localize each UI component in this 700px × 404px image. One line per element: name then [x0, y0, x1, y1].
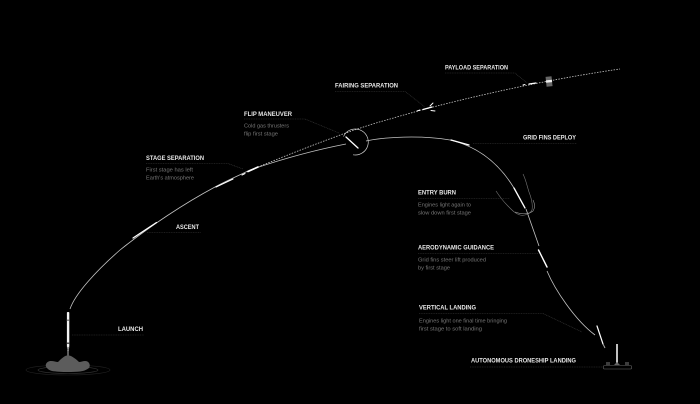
label: vertical landing: VERTICAL LANDING: [419, 304, 476, 312]
label: entry burn: slow down first stage: [418, 210, 471, 216]
stage separation rockets: [216, 167, 258, 187]
droneship with landed rocket: [604, 344, 632, 369]
label: flip maneuver: flip first stage: [244, 132, 278, 138]
label: launch: LAUNCH: [118, 326, 143, 333]
label: entry burn: [418, 190, 510, 216]
grid fins deploy rocket: [451, 140, 469, 145]
ascent rocket: [133, 222, 156, 238]
label: vertical landing: Engines light one final time bringing: [419, 318, 507, 324]
label: flip maneuver: Cold gas thrusters: [244, 124, 289, 130]
launch rocket: [67, 312, 69, 351]
label: payload separation: PAYLOAD SEPARATION: [445, 64, 508, 72]
label: entry burn: ENTRY BURN: [418, 190, 456, 196]
label: flip maneuver: FLIP MANEUVER: [244, 111, 292, 118]
label: fairing separation: [335, 82, 425, 107]
entry burn rocket and flame: [496, 174, 534, 215]
label: autonomous droneship landing: [470, 358, 603, 367]
label: vertical landing: [419, 304, 582, 332]
label: stage separation: [146, 155, 243, 182]
label: flip maneuver: [244, 111, 339, 138]
second stage dotted trajectory: [258, 69, 620, 167]
label: vertical landing: first stage to soft landing: [419, 326, 482, 332]
fairing separation: [417, 103, 435, 111]
label: aerodynamic guidance: [418, 244, 538, 272]
label: payload separation: [445, 64, 527, 83]
launch pad with smoke cloud: [26, 350, 110, 375]
label: grid fins deploy: GRID FINS DEPLOY: [523, 134, 577, 142]
ascent trajectory: [70, 144, 346, 309]
first stage return trajectory: [366, 137, 595, 335]
label: aerodynamic guidance: Grid fins steer lift produced: [418, 258, 486, 264]
label: ascent: ASCENT: [176, 224, 199, 231]
label: launch: [72, 326, 144, 335]
payload separation: [523, 76, 553, 87]
label: aerodynamic guidance: AERODYNAMIC GUIDANCE: [418, 244, 495, 252]
vertical landing rocket: [597, 326, 605, 348]
label: ascent: [147, 224, 201, 232]
flip maneuver circle: [344, 129, 368, 155]
label: stage separation: STAGE SEPARATION: [146, 155, 204, 162]
label: autonomous droneship landing: AUTONOMOUS DRONESHIP LANDING: [471, 358, 576, 364]
label: stage separation: Earth's atmosphere: [146, 176, 194, 182]
label: grid fins deploy: [473, 134, 577, 144]
label: stage separation: First stage has left: [146, 168, 194, 174]
label: entry burn: Engines light again to: [418, 202, 471, 208]
label: fairing separation: FAIRING SEPARATION: [335, 82, 398, 90]
label: aerodynamic guidance: by first stage: [418, 266, 450, 272]
aerodynamic guidance rocket: [538, 250, 547, 267]
